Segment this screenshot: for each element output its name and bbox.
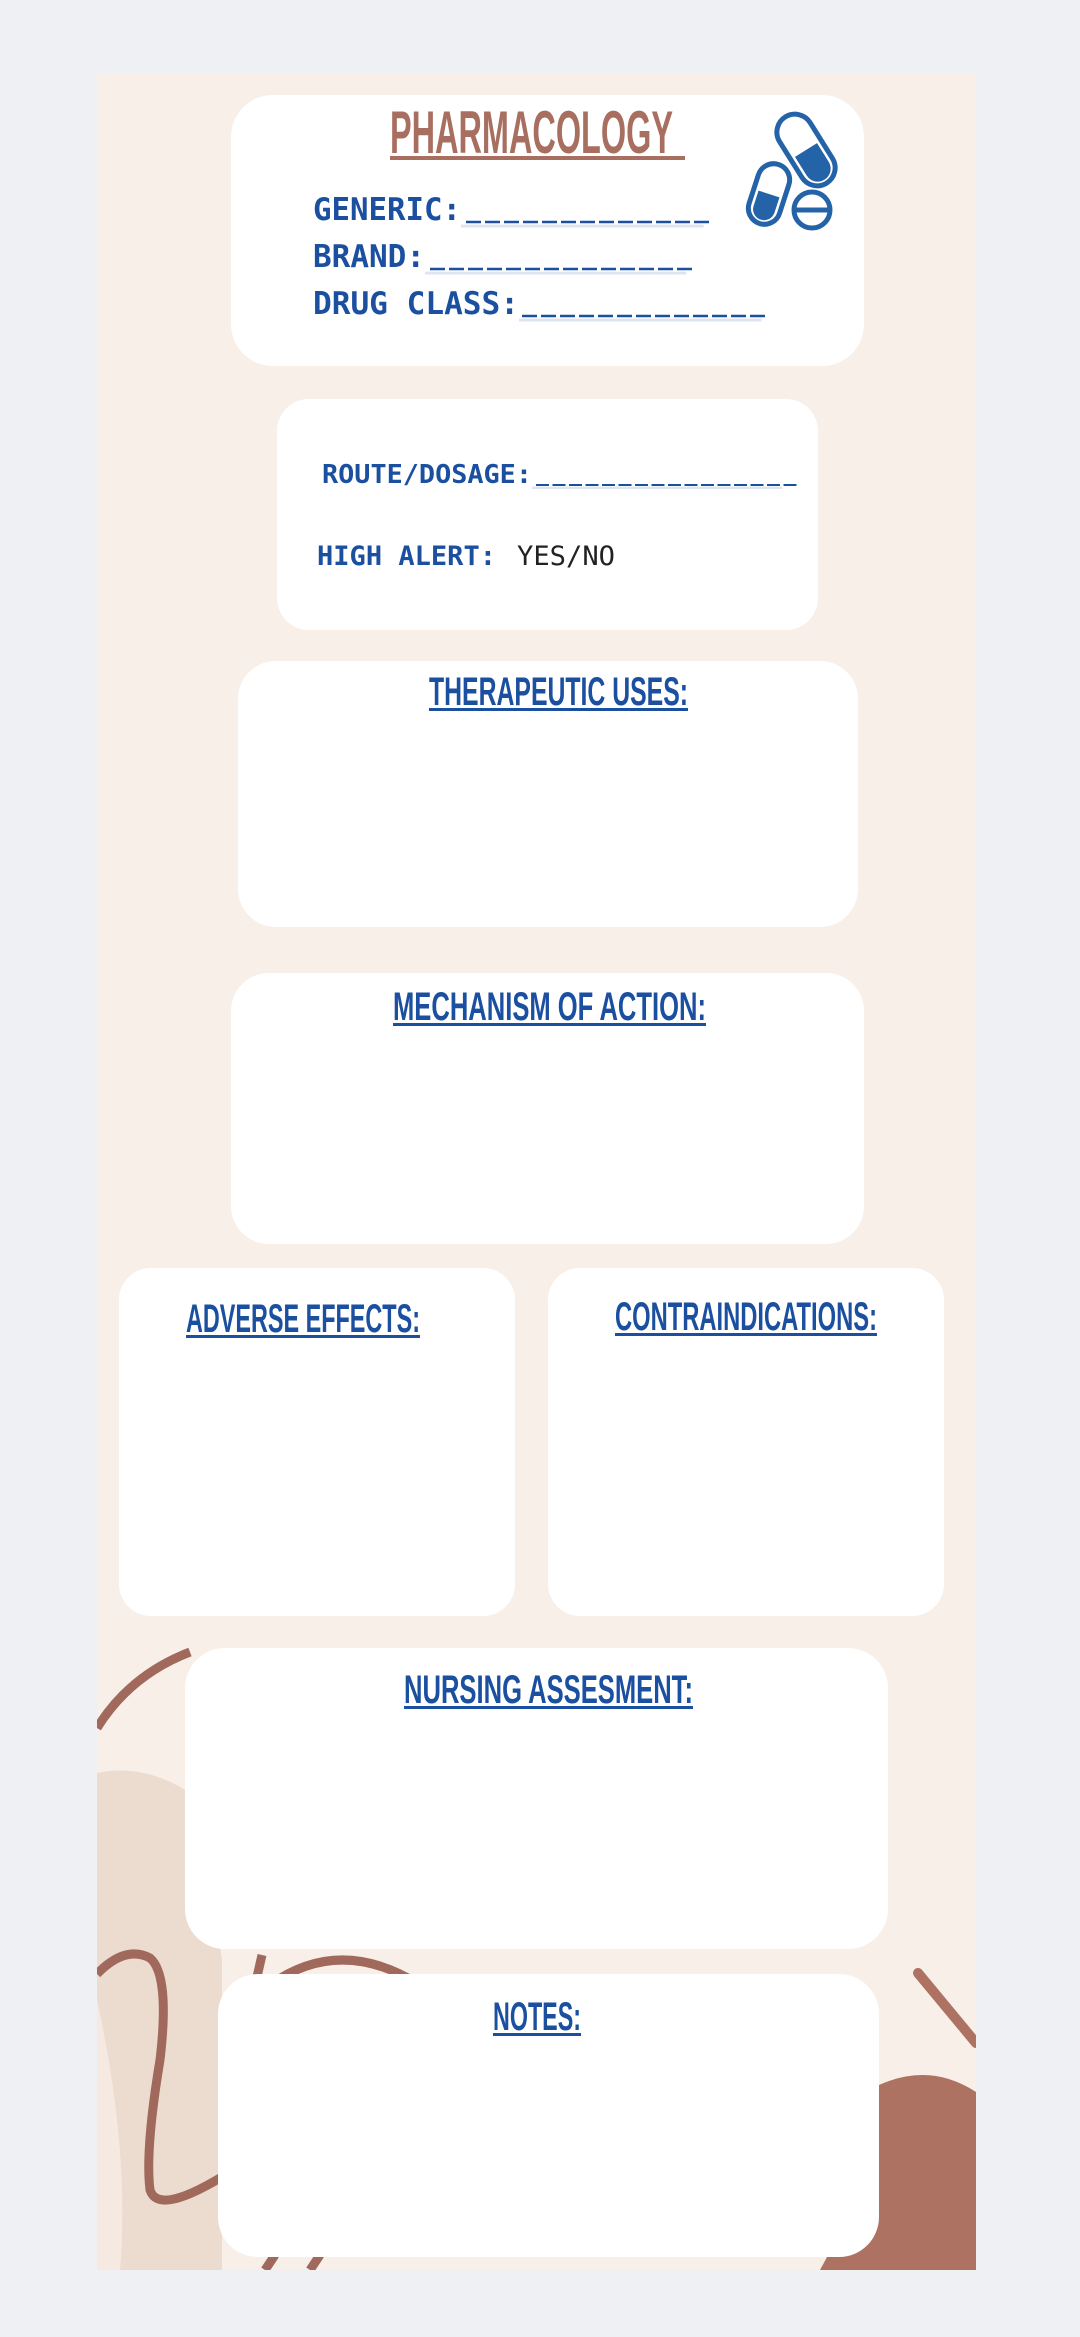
heading: CONTRAINDICATIONS: <box>615 1295 877 1339</box>
field: route/dosage: ROUTE/DOSAGE:________________ <box>322 460 783 490</box>
field: high alert: HIGH ALERT: <box>317 541 496 572</box>
field: generic: GENERIC:_____________ <box>313 192 704 228</box>
panel: therapeutic uses <box>238 661 858 927</box>
heading: ADVERSE EFFECTS: <box>186 1297 420 1341</box>
field: drug class: DRUG CLASS:_____________ <box>313 286 762 322</box>
heading <box>429 670 688 714</box>
heading <box>493 1995 581 2039</box>
heading: MECHANISM OF ACTION: <box>393 985 706 1029</box>
title: PHARMACOLOGY <box>390 99 673 166</box>
sheet background <box>97 73 976 2270</box>
field: brand: BRAND:______________ <box>313 239 687 275</box>
panel: adverse effects <box>119 1268 515 1616</box>
heading <box>186 1297 420 1341</box>
panel: drug info <box>231 95 864 366</box>
heading: THERAPEUTIC USES: <box>429 670 688 714</box>
title <box>390 99 685 166</box>
heading: NOTES: <box>493 1995 581 2039</box>
background decorations <box>97 1652 976 2270</box>
panel: nursing assessment <box>185 1648 888 1949</box>
panel: route/dosage <box>277 399 818 630</box>
panel: contraindications <box>548 1268 944 1616</box>
heading: NURSING ASSESMENT: <box>404 1668 693 1712</box>
field: high alert: YES/NO <box>517 541 615 572</box>
panel: mechanism of action <box>231 973 864 1244</box>
heading <box>393 985 706 1029</box>
heading <box>404 1668 693 1712</box>
icon: pills <box>744 107 842 228</box>
heading <box>615 1295 877 1339</box>
panel: notes <box>218 1974 879 2257</box>
